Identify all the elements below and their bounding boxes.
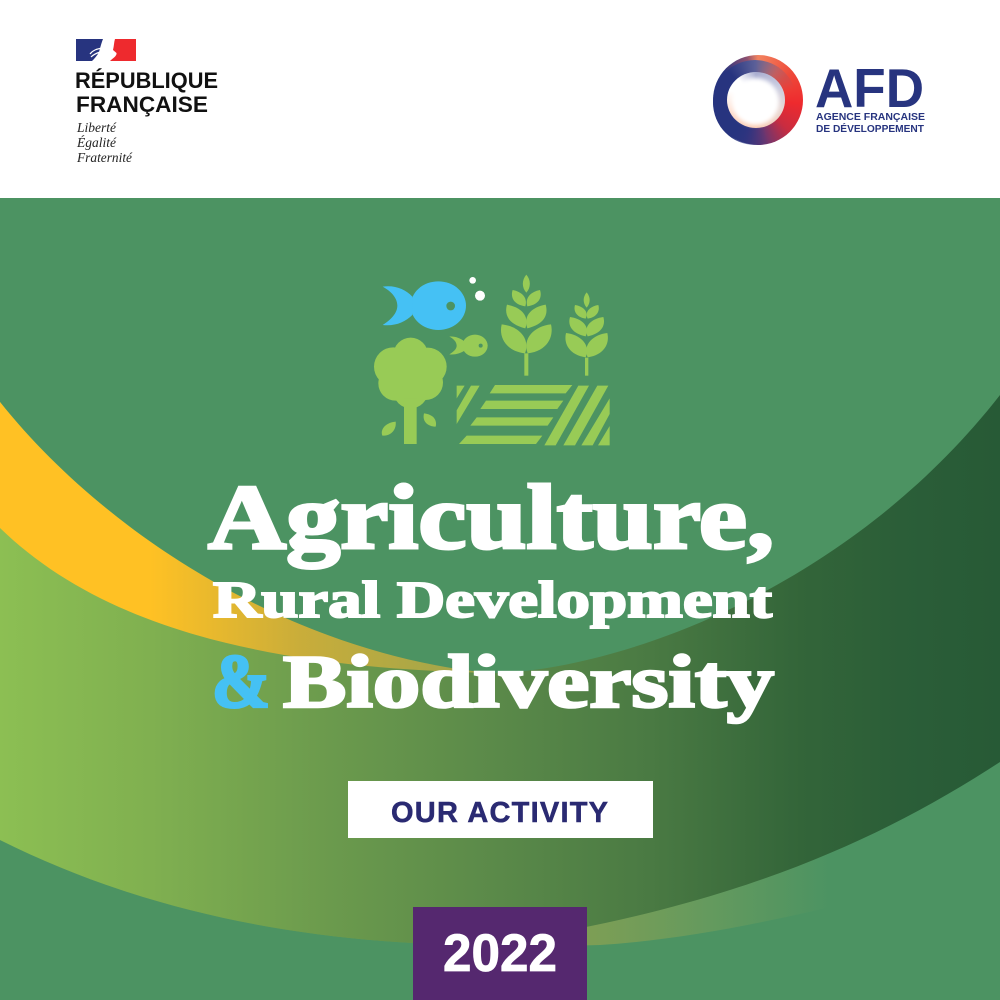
light lower wave: [0, 762, 1000, 946]
yellow wave: [0, 402, 490, 673]
logo: AFD wordmark: AGENCE FRANÇAISE: [816, 112, 925, 123]
text: Fraternité: Fraternité: [76, 150, 133, 165]
label: year: 2022: [443, 924, 557, 983]
text: Liberté: Liberté: [76, 120, 117, 135]
icon: fish, tree, wheat and field: [374, 275, 610, 445]
logo: République Française: [75, 39, 218, 165]
title: Agriculture: Agriculture,: [208, 466, 774, 568]
logo: AFD ring: [713, 55, 803, 145]
gradient wave band: [0, 395, 1000, 945]
icon: small wheat: [565, 292, 608, 376]
logo: AFD wordmark: DE DÉVELOPPEMENT: [816, 122, 925, 135]
label: year: [413, 907, 587, 1000]
white header background: [0, 0, 1000, 198]
text: République: RÉPUBLIQUE: [75, 68, 218, 93]
title: Biodiversity: Biodiversity: [283, 641, 774, 724]
title: ampersand: &: [212, 640, 270, 724]
icon: bubbles: [469, 277, 485, 301]
icon: striped field: [457, 385, 610, 445]
logo: AFD wordmark: AFD: [815, 57, 924, 119]
label: our activity: [348, 781, 653, 838]
label: our activity: OUR ACTIVITY: [391, 797, 608, 829]
icon: small fish: [449, 335, 488, 357]
icon: big fish: [383, 281, 466, 330]
icon: tree: [374, 338, 447, 444]
text: Française: FRANÇAISE: [76, 92, 208, 117]
icon: large wheat: [501, 275, 552, 376]
title: Rural Development: Rural Development: [213, 572, 773, 629]
icon: tricolour flag: [76, 39, 136, 61]
text: Égalité: Égalité: [76, 135, 117, 150]
